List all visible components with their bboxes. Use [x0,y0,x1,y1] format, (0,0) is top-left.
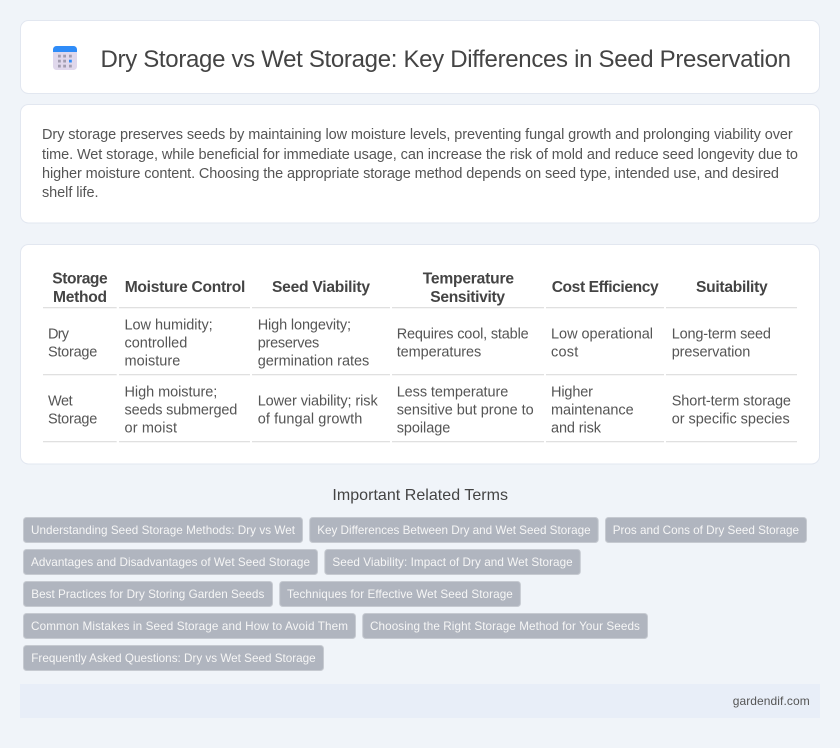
table row: wet storage: maintenance [551,402,634,418]
table row: dry storage: Dry [48,326,70,342]
table header row: Sensitivity [430,289,505,306]
table row: wet storage: or moist [124,420,177,436]
table row: wet storage: High moisture; [124,384,217,400]
tag [24,550,318,574]
heading: important related terms: Important Related Terms [332,487,508,504]
tag [24,614,356,638]
table row: wet storage: spoilage [397,420,450,436]
panel: comparison table [20,244,820,464]
table row: dry storage: germination rates [258,353,369,369]
icon: calendar [53,46,77,70]
table header row: Cost Efficiency [552,279,659,296]
table row: dry storage: moisture [124,353,180,369]
table row: dry storage: Storage [48,344,97,360]
tag [24,518,302,542]
footer bar [20,684,820,718]
tag [24,646,324,670]
table row: dry storage: preservation [672,344,750,360]
tag [606,518,806,542]
table row: dry storage [48,317,771,369]
intro text: shelf life. [42,185,98,201]
table header row: Temperature [423,270,514,288]
table row: dry storage: Low operational [551,326,653,342]
table header row: Moisture Control [125,279,245,296]
table header row: Seed Viability [272,279,370,296]
intro text [42,127,798,201]
panel: intro paragraph [20,104,820,223]
tag: Understanding Seed Storage Methods: Dry vs Wet [31,524,296,537]
tag: Techniques for Effective Wet Seed Storage [287,588,513,601]
table row: wet storage: sensitive but prone to [397,402,534,418]
table row: dry storage: Long-term seed [672,326,771,342]
table row: dry storage: High longevity; [258,317,351,333]
tag: Pros and Cons of Dry Seed Storage [613,524,799,537]
table row: wet storage: Storage [48,411,97,427]
header panel [20,20,820,94]
tag: Choosing the Right Storage Method for Your Seeds [370,620,640,633]
tag: Key Differences Between Dry and Wet Seed Storage [317,524,591,537]
tag: Common Mistakes in Seed Storage and How to Avoid Them [31,620,348,633]
tag: Advantages and Disadvantages of Wet Seed Storage [31,556,310,569]
title: Dry Storage vs Wet Storage: Key Differences in Seed Preservation [100,46,791,73]
table row: wet storage: Lower viability; risk [258,393,378,409]
table row: dry storage: Low humidity; [124,317,213,333]
table header row [52,270,768,306]
table row: wet storage: or specific species [672,411,790,427]
table row: wet storage: Wet [48,393,73,409]
tag [280,582,520,606]
table header row: Storage [52,270,108,288]
table header row: Suitability [696,279,768,296]
table row: dry storage: temperatures [397,344,481,360]
intro text: higher moisture content. Choosing the appropriate storage method depends on seed type, intended use, and desired [42,166,779,182]
table row: dry storage: Requires cool, stable [397,326,529,342]
table header row: Method [53,289,107,306]
tag: Frequently Asked Questions: Dry vs Wet Seed Storage [31,652,316,665]
table row: wet storage: Short-term storage [672,393,791,409]
tag: Best Practices for Dry Storing Garden Seeds [31,588,264,601]
tag [325,550,580,574]
table row: wet storage: seeds submerged [124,402,237,418]
table row: dry storage: preserves [258,335,319,351]
intro text: time. Wet storage, while beneficial for immediate usage, can increase the risk of mold and reduce seed longevity due to [42,147,798,163]
footer source text: gardendif.com [733,694,810,708]
intro text: Dry storage preserves seeds by maintaining low moisture levels, preventing fungal growth and prolonging viability over [42,127,793,143]
tag [310,518,598,542]
table row: wet storage: Higher [551,384,593,400]
table row: wet storage: Less temperature [397,384,508,400]
table row: dry storage: controlled [124,335,187,351]
table row: wet storage: and risk [551,420,602,436]
table row: dry storage: cost [551,344,578,360]
tag [363,614,648,638]
tag [24,582,272,606]
table row: wet storage [48,384,791,436]
related terms tags [24,518,806,670]
table row: wet storage: of fungal growth [258,411,362,427]
tag: Seed Viability: Impact of Dry and Wet Storage [332,556,573,569]
